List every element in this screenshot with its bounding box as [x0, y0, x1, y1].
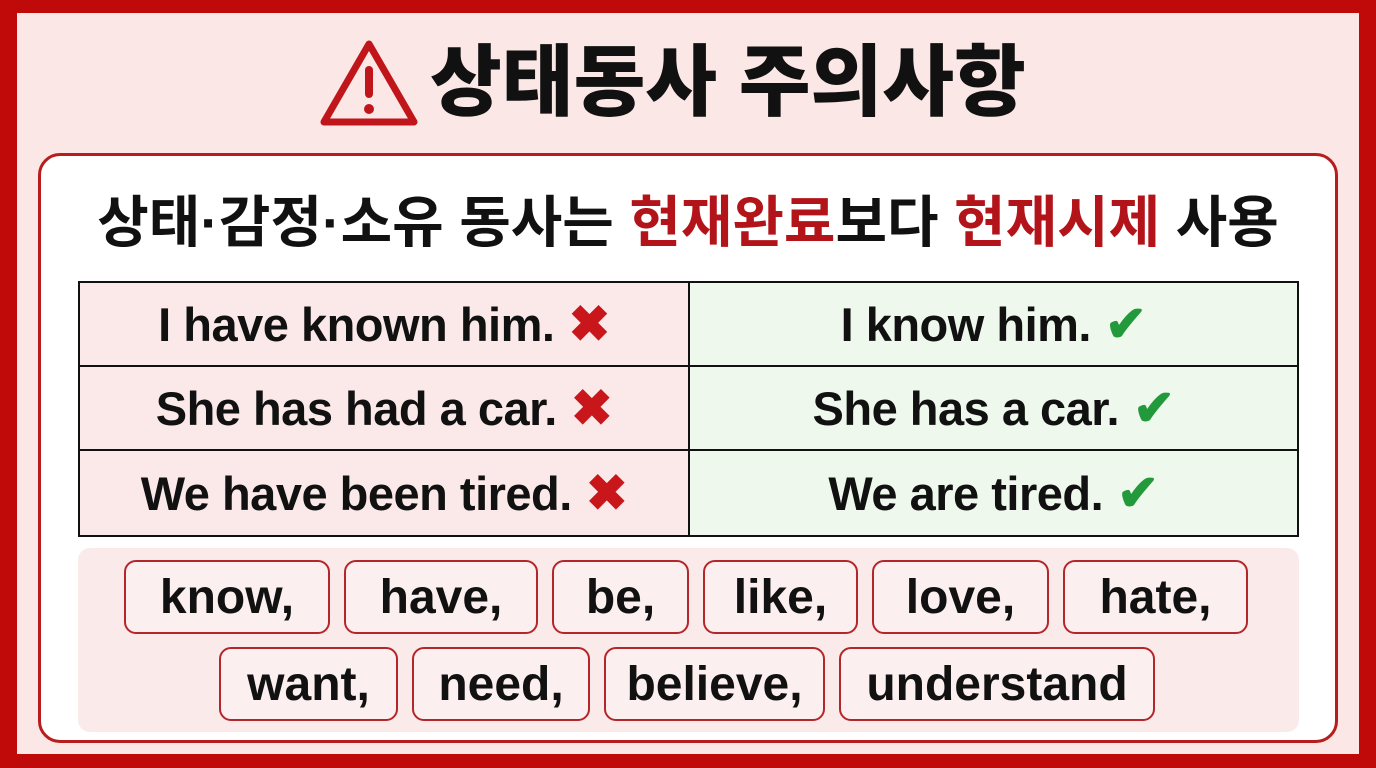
row 3 wrong: We have been tired.: [141, 466, 572, 520]
row 1 wrong: [80, 283, 690, 367]
chip understand: [839, 647, 1155, 721]
chip understand: understand: [866, 658, 1128, 710]
row 1 wrong: I have known him.: [158, 298, 554, 350]
row 3 wrong: [80, 451, 690, 535]
chip want: want,: [247, 658, 370, 710]
chip hate: [1063, 560, 1248, 634]
row 2 wrong: ✖: [571, 380, 612, 436]
chip need: [412, 647, 590, 721]
row 1 wrong: ✖: [568, 296, 610, 352]
title: 상태동사 주의사항: [430, 38, 1026, 126]
row 3 right: ✔: [1117, 465, 1159, 521]
row 3 wrong: ✖: [586, 465, 627, 521]
chip have: [344, 560, 538, 634]
chip love: [872, 560, 1049, 634]
row 2 wrong: [80, 367, 690, 451]
chip have: have,: [380, 570, 502, 624]
comparison table: [78, 281, 1299, 537]
chip need: need,: [438, 658, 564, 710]
chip know: know,: [160, 570, 294, 624]
row 3 right: [690, 451, 1297, 535]
row 1 right: [690, 283, 1297, 367]
row 3 right: We are tired.: [828, 466, 1103, 520]
chip be: be,: [586, 570, 655, 624]
chip like: [703, 560, 858, 634]
verb chips: [78, 548, 1299, 732]
row 2 right: She has a car.: [813, 382, 1119, 434]
chip be: [552, 560, 689, 634]
row 2 right: ✔: [1133, 380, 1174, 436]
chip like: like,: [734, 570, 827, 624]
panel: main: [38, 153, 1338, 743]
icon: warning triangle: [320, 40, 418, 126]
chip want: [219, 647, 398, 721]
row 2 wrong: She has had a car.: [156, 382, 557, 434]
chip love: love,: [906, 570, 1015, 624]
chip hate: hate,: [1099, 570, 1212, 624]
subtitle: 상태·감정·소유 동사는 현재완료보다 현재시제 사용: [97, 191, 1279, 254]
chip believe: believe,: [626, 658, 803, 710]
row 1 right: I know him.: [841, 298, 1091, 350]
row 1 right: ✔: [1105, 296, 1146, 352]
row 2 right: [690, 367, 1297, 451]
chip believe: [604, 647, 825, 721]
chip know: [124, 560, 330, 634]
